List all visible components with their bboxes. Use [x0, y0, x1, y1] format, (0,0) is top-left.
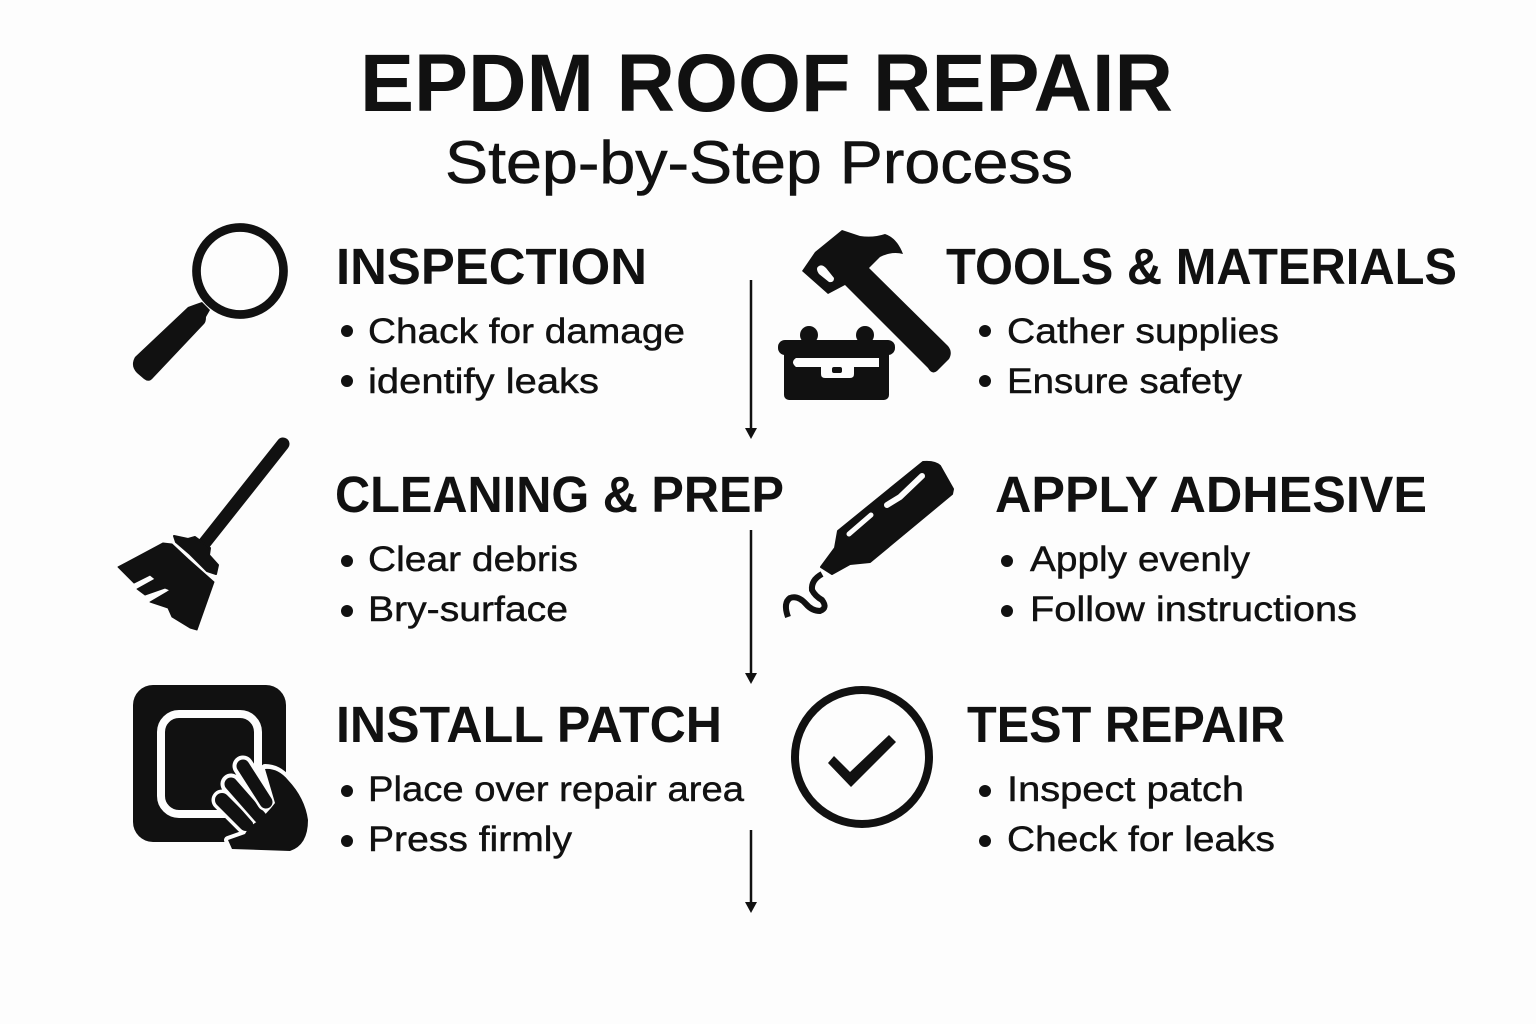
arrow: final step: [745, 830, 757, 913]
subtitle: Step-by-Step Process: [445, 129, 1073, 196]
bullet list: cleaning and prep: [341, 539, 578, 629]
bullet list: apply adhesive: [1001, 539, 1357, 629]
bullet list: tools and materials: Cather supplies: [1007, 311, 1279, 351]
icon: hammer and toolbox: [778, 230, 951, 400]
panel: install patch: [133, 685, 744, 859]
icon: magnifying glass: [133, 228, 284, 381]
bullet list: install patch: Press firmly: [368, 819, 572, 859]
panel: tools and materials: [778, 230, 1457, 401]
icon: adhesive tube: [786, 462, 953, 617]
bullet list: tools and materials: [979, 311, 1279, 401]
bullet list: cleaning and prep: Clear debris: [368, 539, 578, 579]
bullet list: apply adhesive: Follow instructions: [1030, 589, 1357, 629]
bullet list: inspection: identify leaks: [368, 361, 599, 401]
bullet list: test repair: Inspect patch: [1007, 769, 1244, 809]
bullet list: install patch: [341, 769, 744, 859]
panel: inspection: [133, 228, 685, 401]
heading: test repair: TEST REPAIR: [967, 696, 1285, 753]
bullet list: install patch: Place over repair area: [368, 769, 744, 809]
heading: apply adhesive: APPLY ADHESIVE: [995, 466, 1427, 523]
bullet list: apply adhesive: Apply evenly: [1030, 539, 1250, 579]
bullet list: test repair: Check for leaks: [1007, 819, 1275, 859]
title: EPDM ROOF REPAIR: [360, 38, 1173, 129]
heading: cleaning and prep: CLEANING & PREP: [335, 466, 784, 523]
bullet list: cleaning and prep: Bry-surface: [368, 589, 568, 629]
icon: check circle: [795, 690, 929, 824]
bullet list: test repair: [979, 769, 1275, 859]
bullet list: inspection: [341, 311, 685, 401]
arrow: step 3 to step 4: [745, 530, 757, 684]
heading: inspection: INSPECTION: [336, 238, 647, 295]
panel: apply adhesive: [786, 462, 1427, 629]
panel: test repair: [795, 690, 1285, 859]
arrow: step 1 to step 2: [745, 280, 757, 439]
heading: tools and materials: TOOLS & MATERIALS: [946, 238, 1457, 295]
icon: broom: [118, 444, 283, 630]
icon: patch and hand: [133, 685, 308, 851]
heading: install patch: INSTALL PATCH: [336, 696, 722, 753]
bullet list: tools and materials: Ensure safety: [1007, 361, 1242, 401]
bullet list: inspection: Chack for damage: [368, 311, 685, 351]
panel: cleaning and prep: [118, 444, 784, 630]
